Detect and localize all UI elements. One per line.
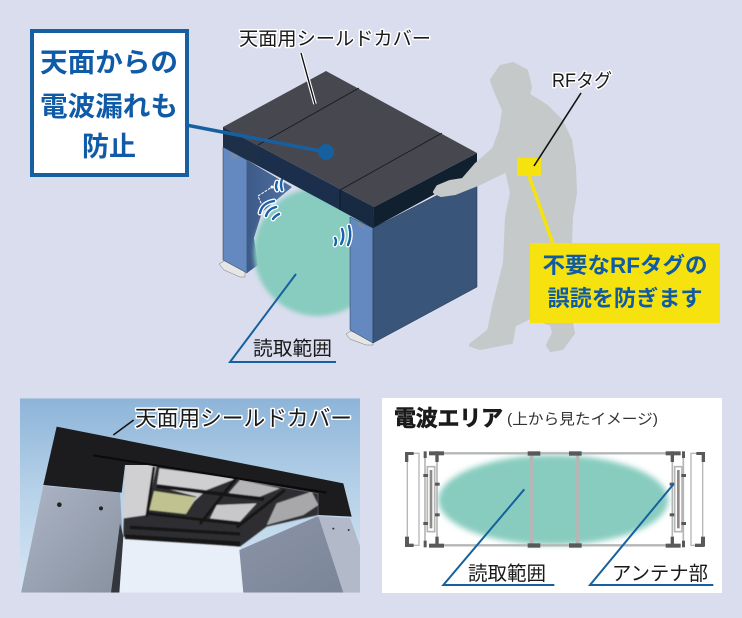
- wave area ellipse: [438, 455, 668, 545]
- RF tag marker: [517, 93, 581, 244]
- shield gate illustration: [219, 71, 477, 345]
- panel subheading: (上から見たイメージ): [507, 411, 658, 428]
- ceiling structure: [123, 465, 318, 547]
- callout: prevents misreading: [530, 243, 720, 323]
- label: reading range: [230, 274, 336, 362]
- person silhouette: [435, 64, 575, 350]
- callout: prevents radio leakage: [32, 31, 334, 175]
- callout: prevents radio leakage: 天面からの: [40, 48, 178, 78]
- panel: photo of gate from below: [20, 398, 360, 593]
- leader line: [113, 420, 134, 435]
- label: antenna: アンテナ部: [612, 563, 708, 585]
- top shield cover: [223, 71, 477, 228]
- black roof cover: [43, 427, 352, 517]
- callout: prevents misreading: 不要なRFタグの: [542, 253, 708, 278]
- callout: prevents radio leakage: 防止: [82, 132, 136, 162]
- callout: prevents misreading: 誤読を防ぎます: [548, 286, 702, 311]
- callout: prevents radio leakage: 電波漏れも: [40, 92, 178, 122]
- reading range sphere: [254, 188, 382, 316]
- right pillar: [346, 175, 477, 345]
- icon: radio waves: [258, 179, 350, 245]
- label: reading range: 読取範囲: [468, 563, 546, 585]
- left pillar: [21, 486, 123, 593]
- top-view diagram: [405, 451, 713, 585]
- right pillar: [239, 516, 360, 593]
- gate opening: [120, 537, 243, 593]
- label: top shield cover: 天面用シールドカバー: [239, 29, 431, 50]
- panel: radio wave area: [382, 398, 722, 593]
- leader lines: [443, 484, 713, 585]
- label: RF tag: RFタグ: [552, 70, 612, 92]
- panel heading: 電波エリア: [394, 406, 503, 431]
- label: photo top cover: 天面用シールドカバー: [135, 406, 352, 431]
- leader: top cover label: [301, 53, 315, 104]
- left pillar: [219, 147, 292, 277]
- label: reading range: 読取範囲: [253, 338, 332, 360]
